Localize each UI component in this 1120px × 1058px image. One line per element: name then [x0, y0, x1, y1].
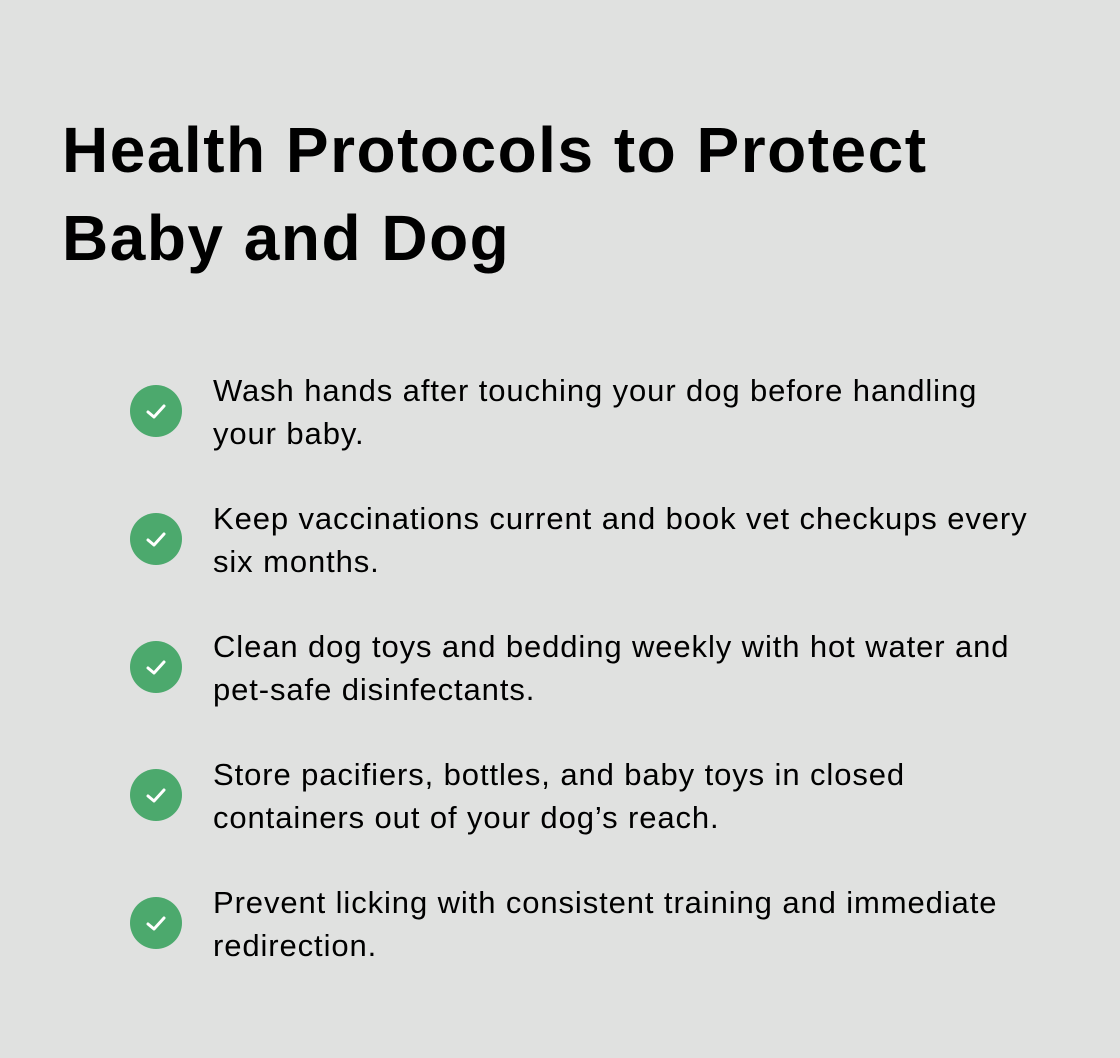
item 4 — [130, 757, 905, 835]
text — [213, 501, 1028, 579]
text — [213, 373, 977, 451]
item 5 — [130, 885, 997, 963]
icon: check — [130, 385, 182, 437]
text: your baby. — [213, 416, 364, 451]
text: redirection. — [213, 928, 377, 963]
text — [213, 757, 905, 835]
item 2 — [130, 501, 1028, 579]
text: Clean dog toys and bedding weekly with hot water and — [213, 629, 1009, 664]
item 3 — [130, 629, 1009, 707]
text: Prevent licking with consistent training and immediate — [213, 885, 997, 920]
title: Health Protocols to Protect — [62, 114, 928, 186]
text — [213, 885, 997, 963]
icon: check — [130, 513, 182, 565]
text: Keep vaccinations current and book vet checkups every — [213, 501, 1028, 536]
title: Baby and Dog — [62, 202, 510, 274]
text: Store pacifiers, bottles, and baby toys in closed — [213, 757, 905, 792]
icon: check — [130, 641, 182, 693]
item 1 — [130, 373, 977, 451]
title — [62, 114, 928, 274]
text: pet-safe disinfectants. — [213, 672, 535, 707]
icon: check — [130, 769, 182, 821]
text — [213, 629, 1009, 707]
text: six months. — [213, 544, 380, 579]
text: Wash hands after touching your dog before handling — [213, 373, 977, 408]
text: containers out of your dog’s reach. — [213, 800, 720, 835]
icon: check — [130, 897, 182, 949]
